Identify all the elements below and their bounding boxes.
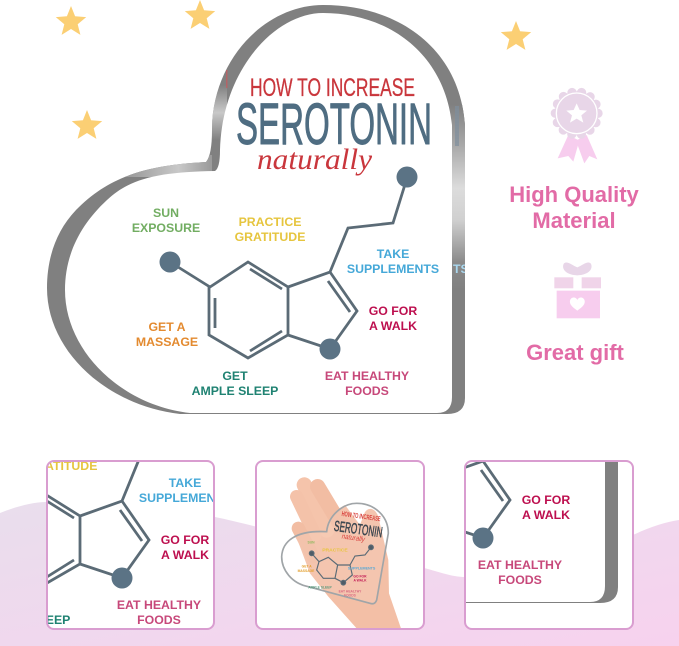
mini labels: GO FOR: [353, 575, 367, 579]
close-up molecule: [48, 462, 151, 588]
close-up labels: FOODS: [498, 573, 542, 587]
mini labels: SUN: [307, 540, 315, 544]
serotonin molecule: [160, 166, 418, 360]
label: eat healthy foods: EAT HEALTHY: [325, 369, 409, 383]
label: get a massage: GET A: [148, 320, 186, 334]
mini title: HOW TO INCREASE: [341, 511, 381, 523]
label: sun exposure: EXPOSURE: [132, 221, 200, 235]
mini labels: MASSAGE: [298, 569, 315, 573]
close-up labels: FOODS: [137, 613, 181, 627]
ghost reflections on edge: [226, 70, 469, 276]
close-up heart corner: [466, 462, 618, 603]
label: take supplements: TAKE: [377, 247, 409, 261]
background wave: [0, 502, 679, 646]
mini labels: [298, 540, 376, 598]
title: naturally: naturally: [257, 143, 373, 176]
mini labels: AMPLE SLEEP: [308, 585, 333, 589]
panel: molecule close-up: [46, 460, 215, 630]
label: sun exposure: SUN: [153, 206, 179, 220]
close-up labels: GO FOR: [161, 533, 209, 547]
mini molecule: [309, 545, 373, 585]
panel: plaque on hand: [256, 461, 424, 629]
label: eat healthy foods: FOODS: [345, 384, 389, 398]
label: get ample sleep: AMPLE SLEEP: [192, 384, 278, 398]
panel: corner close-up: [464, 460, 634, 630]
mini labels: PRACTICE: [322, 547, 348, 553]
close-up molecule: [466, 462, 512, 548]
acrylic heart plaque: [47, 5, 470, 414]
close-up labels: EAT HEALTHY: [478, 558, 562, 572]
icon: gift box: [554, 262, 601, 318]
text: great gift: Great gift: [526, 340, 625, 365]
mini title: naturally: [341, 532, 367, 544]
icon: quality ribbon: [555, 91, 599, 163]
label: practice gratitude: GRATITUDE: [235, 230, 305, 244]
text: high quality material: Material: [532, 208, 616, 233]
label: take supplements: SUPPLEMENTS: [347, 262, 439, 276]
heart face: [65, 13, 452, 413]
mini labels: GET A: [302, 564, 312, 568]
title: serotonin: SEROTONIN: [236, 92, 432, 157]
hand: [295, 485, 401, 628]
mini labels: EAT HEALTHY: [339, 590, 362, 594]
edge highlights: [125, 88, 465, 268]
title: how to increase: HOW TO INCREASE: [250, 74, 415, 102]
close-up labels: TAKE: [169, 476, 201, 490]
close-up labels: GRATITUDE: [27, 459, 97, 473]
ghost reflections on edge: TS: [453, 262, 469, 276]
star 3: [72, 110, 102, 139]
mini plaque edge: [282, 503, 388, 604]
star 4: [501, 21, 531, 50]
label: get a massage: MASSAGE: [136, 335, 198, 349]
label: get ample sleep: GET: [222, 369, 248, 383]
star 2: [185, 0, 215, 29]
label: go for a walk: GO FOR: [369, 304, 417, 318]
mini labels: A WALK: [353, 579, 367, 583]
label: practice gratitude: PRACTICE: [239, 215, 301, 229]
close-up labels: [48, 462, 213, 624]
text: high quality material: High Quality: [509, 182, 640, 207]
label: go for a walk: A WALK: [369, 319, 417, 333]
mini labels: SUPPLEMENTS: [348, 566, 376, 570]
close-up labels: A WALK: [161, 548, 209, 562]
star 1: [56, 6, 86, 35]
close-up labels: [478, 493, 570, 587]
close-up labels: A WALK: [522, 508, 570, 522]
close-up labels: GO FOR: [522, 493, 570, 507]
mini labels: FOODS: [344, 594, 357, 598]
heart edge: [47, 5, 465, 414]
mini title: SEROTONIN: [333, 519, 383, 541]
close-up labels: SUPPLEMENTS: [139, 491, 231, 505]
close-up labels: EAT HEALTHY: [117, 598, 201, 612]
mini title: [334, 511, 383, 543]
